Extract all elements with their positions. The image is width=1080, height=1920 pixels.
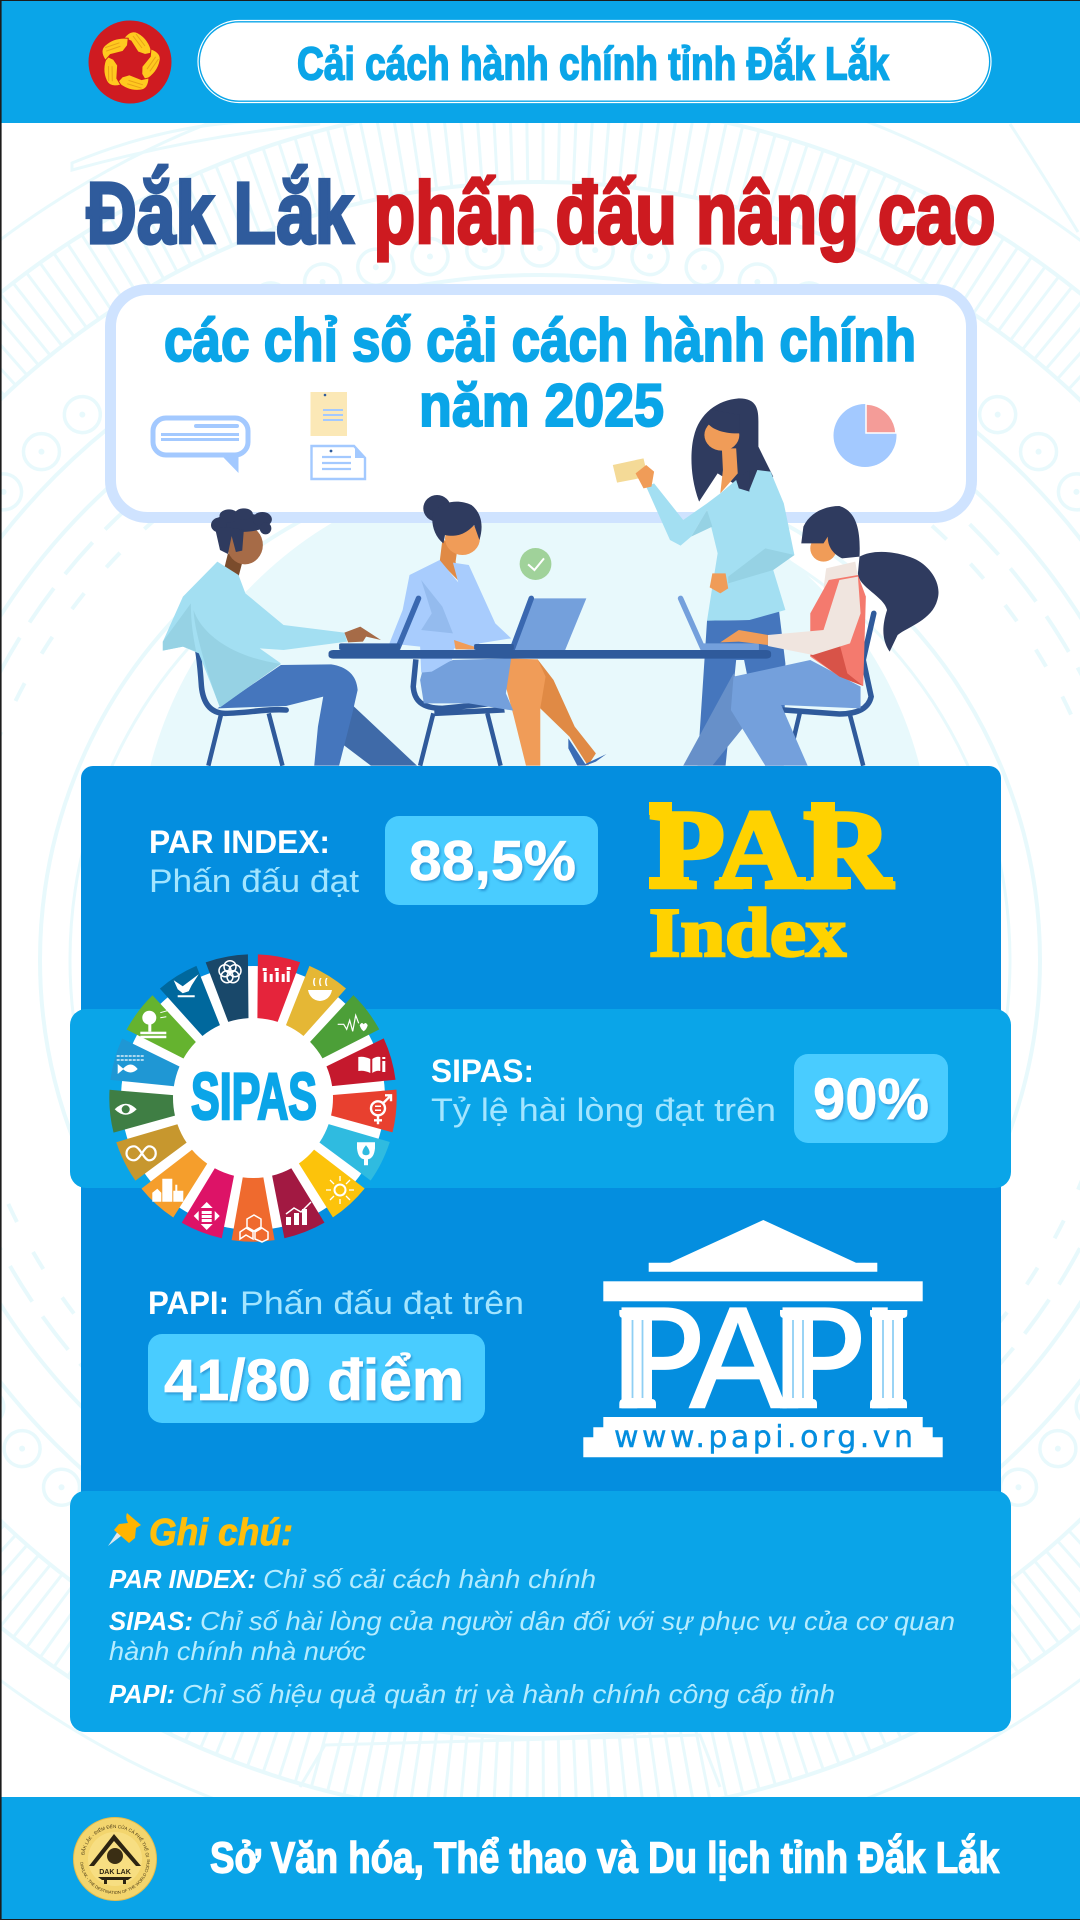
block: PAR index (149, 788, 893, 972)
main title (86, 165, 996, 262)
icon: document (312, 446, 365, 479)
person: standing woman (613, 398, 794, 766)
SIPAS label: Tỷ lệ hài lòng đạt trên (431, 1092, 776, 1128)
person: woman with ponytail (683, 506, 939, 766)
note: SIPAS: SIPAS: (109, 1606, 193, 1636)
person: woman with bun (389, 495, 606, 766)
SDG wheel (108, 953, 398, 1242)
header title: Cải cách hành chính tỉnh Đắk Lắk (297, 38, 889, 90)
panel: main blue (81, 766, 1001, 1506)
panel: SIPAS band (70, 1009, 1011, 1188)
icon: gold seal: DAK LAK (99, 1869, 131, 1876)
PAR logo: PAR (650, 788, 893, 912)
wheel segments (108, 953, 398, 1242)
note: SIPAS: Chỉ số hài lòng của người dân đối với sự phục vụ của cơ quan (200, 1606, 955, 1636)
subtitle text: năm 2025 (419, 372, 664, 439)
note: PAR INDEX: Chỉ số cải cách hành chính (263, 1564, 596, 1594)
note: PAPI: PAPI: (109, 1679, 175, 1709)
SIPAS label: SIPAS: (431, 1053, 534, 1089)
header band (0, 0, 1080, 123)
PAPI label (148, 1285, 524, 1321)
PAPI value pill (148, 1334, 485, 1423)
SIPAS value pill (794, 1054, 948, 1143)
laptop: left (339, 598, 419, 650)
PAR label: Phấn đấu đạt (149, 863, 359, 899)
subtitle text (164, 307, 916, 439)
note: PAPI: Chỉ số hiệu quả quản trị và hành chính công cấp tỉnh (182, 1679, 835, 1709)
person: man seated (163, 508, 417, 766)
main title: Đắk Lắk (86, 165, 354, 262)
block: PAPI (148, 1220, 943, 1457)
PAR value pill (385, 816, 598, 905)
illustration: meeting people (163, 398, 939, 766)
PAPI value pill: 41/80 điểm (164, 1348, 464, 1413)
icon: top emblem (88, 20, 172, 104)
table (329, 650, 771, 659)
notes heading: Ghi chú: (149, 1512, 293, 1554)
PAPI label: PAPI: (148, 1285, 229, 1321)
icon: pie chart (834, 404, 896, 467)
icon: chat bubble (153, 418, 248, 473)
wheel label: SIPAS (191, 1059, 317, 1133)
subtitle text: các chỉ số cải cách hành chính (164, 307, 916, 374)
PAPI logo: PAPI (611, 1279, 900, 1438)
pale circle behind people (138, 467, 932, 1261)
note: SIPAS: hành chính nhà nước (109, 1636, 366, 1666)
PAR label (149, 824, 359, 899)
subtitle panel (110, 290, 972, 518)
note: SIPAS (109, 1606, 955, 1666)
wheel icons (115, 961, 391, 1242)
panel: notes (70, 1491, 1011, 1732)
icon: gold seal (73, 1817, 157, 1901)
SIPAS label (431, 1053, 776, 1128)
header pill (198, 20, 991, 102)
SIPAS value pill: 90% (813, 1067, 929, 1132)
PAPI logo (583, 1220, 943, 1457)
PAR label: PAR INDEX: (149, 824, 330, 860)
PAPI logo: www.papi.org.vn (614, 1420, 913, 1455)
laptop: middle (474, 598, 586, 650)
PAPI label: Phấn đấu đạt trên (240, 1285, 524, 1321)
note: PAR INDEX: PAR INDEX: (109, 1564, 256, 1594)
icon: gold seal: ĐẮK LẮK - ĐIỂM ĐẾN CỦA CÀ PHÊ THẾ GIỚI (81, 1824, 150, 1858)
icon: green check badge (520, 548, 551, 580)
note: PAR INDEX (109, 1564, 596, 1594)
icon: gold seal: DAKLAK - THE DESTINATION OF THE WORLD COFFEE (80, 1859, 150, 1894)
PAR logo: Index (649, 895, 846, 972)
laptop: right (681, 598, 759, 651)
PAR value pill: 88,5% (409, 829, 576, 893)
icon: yellow note (310, 392, 347, 436)
PAR logo (649, 788, 893, 972)
icon: pushpin (108, 1513, 141, 1546)
